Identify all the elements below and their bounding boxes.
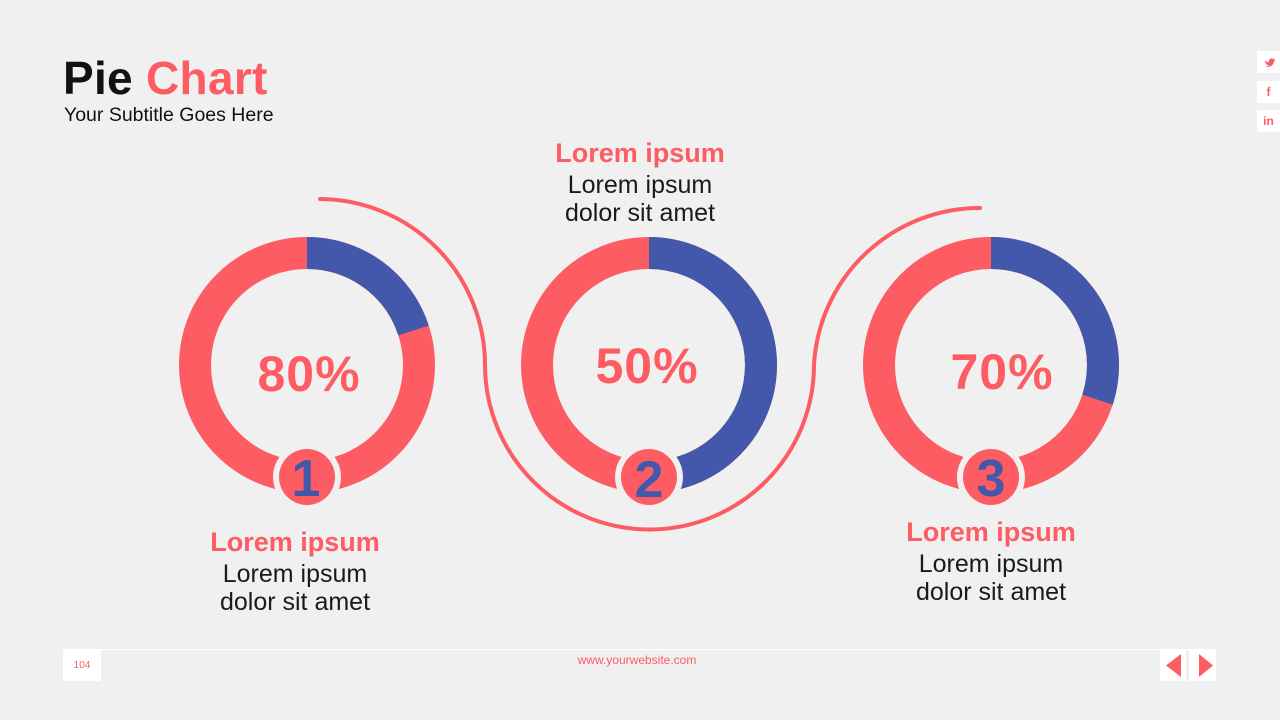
title: Pie Chart [63,52,268,104]
text block 3: Lorem ipsum [906,517,1076,547]
text block 2: Lorem ipsum [568,171,712,199]
donut 2: 50% [595,338,699,394]
icon: linkedin: in [1263,114,1274,128]
text block 1: dolor sit amet [220,588,370,616]
nav arrows [1160,650,1216,681]
subtitle: Your Subtitle Goes Here [64,104,274,126]
icon: facebook: f [1266,85,1270,99]
social icons [1257,51,1280,132]
donut 3: 3 [977,450,1005,508]
connector curve [320,199,980,530]
text block 3 [906,517,1076,606]
text block 2 [555,138,725,227]
page number: 104 [74,660,90,671]
donut 1: 80% [257,346,361,402]
icon: linkedin [1257,110,1280,132]
icon: twitter [1257,51,1280,73]
donut 2: 2 [635,451,663,509]
icon: facebook [1257,81,1280,103]
footer line [63,648,1215,650]
donut 3: 70% [950,344,1054,400]
text block 3: Lorem ipsum [919,550,1063,578]
page number [63,650,101,681]
text block 3: dolor sit amet [916,578,1066,606]
text block 2: dolor sit amet [565,199,715,227]
text block 1 [210,527,380,616]
text block 1: Lorem ipsum [210,527,380,557]
donut 3 [879,253,1103,511]
text block 1: Lorem ipsum [223,560,367,588]
donut 1: 1 [292,450,320,508]
text block 2: Lorem ipsum [555,138,725,168]
website: www.yourwebsite.com [578,653,696,667]
donut 1 [195,253,419,511]
donut 2 [537,253,761,511]
